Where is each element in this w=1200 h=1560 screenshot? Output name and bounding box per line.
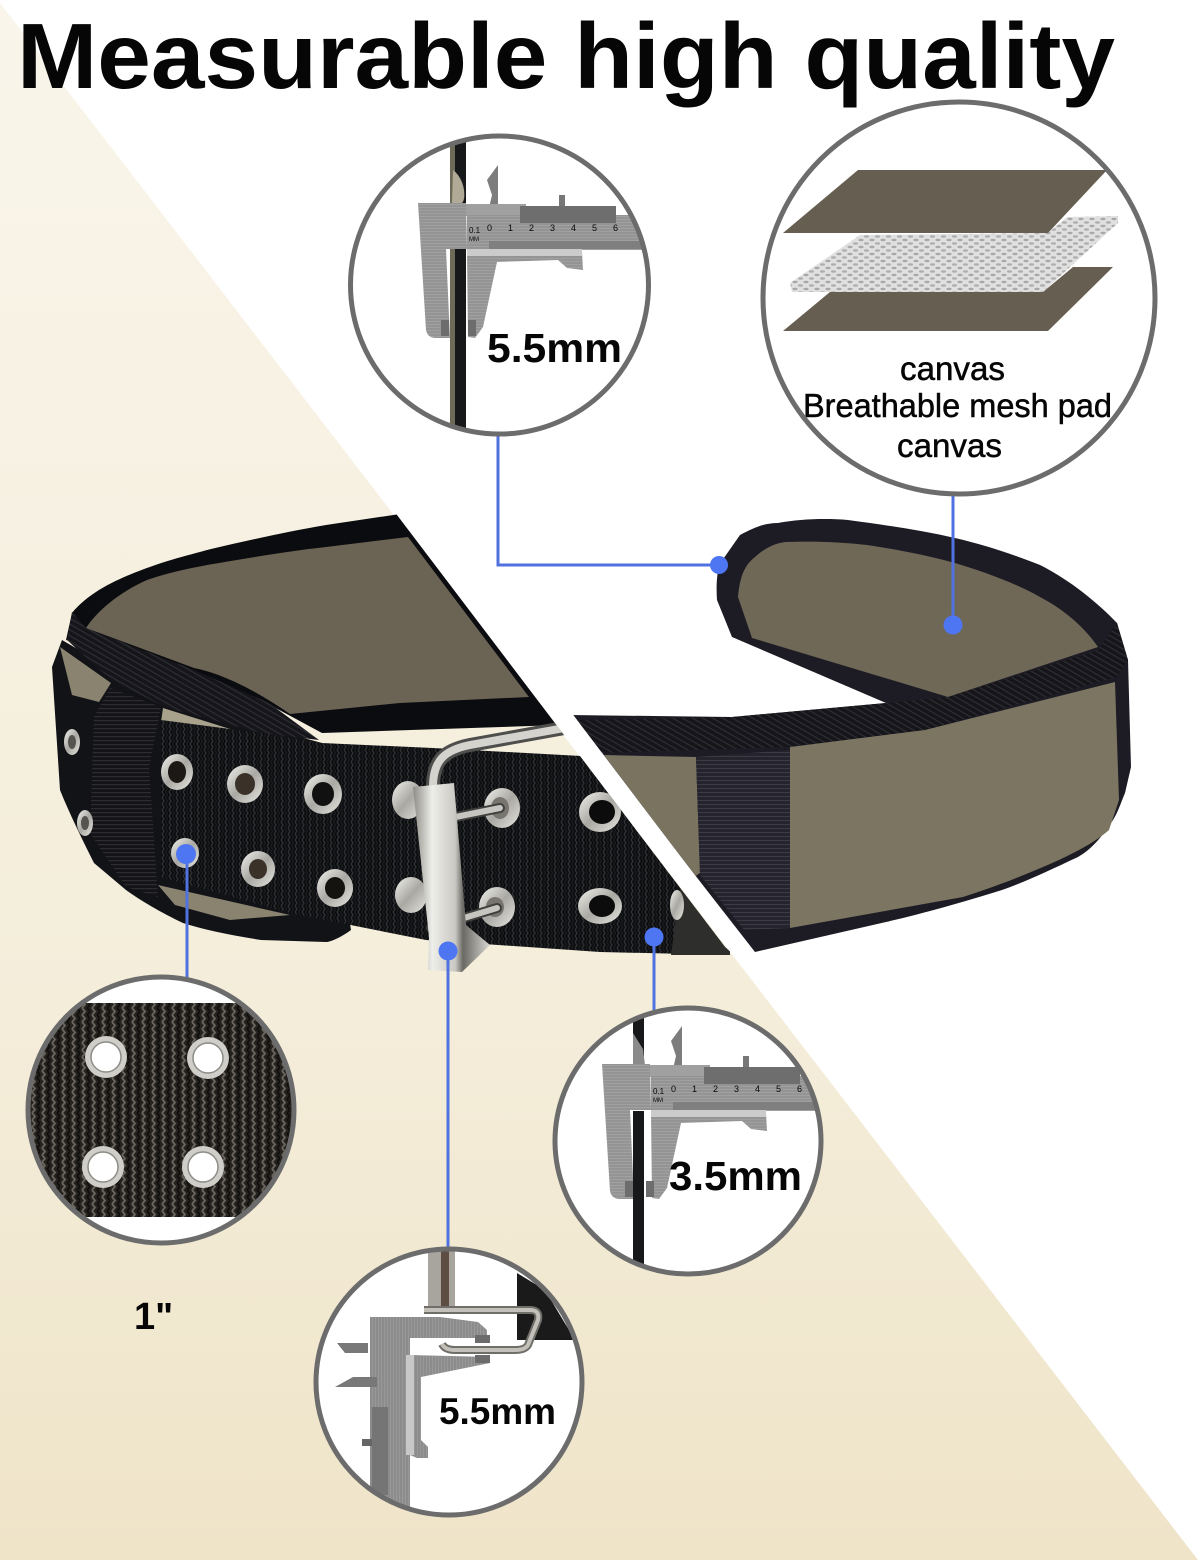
buckle and rotated caliper — [335, 1248, 575, 1507]
layer labels: canvas — [897, 427, 1002, 464]
leader: layers circle to lining — [952, 493, 954, 625]
grommets — [161, 754, 684, 927]
main woven strap — [161, 720, 730, 955]
belt: left half, front with buckle — [52, 514, 730, 972]
caliper and strap edge: 0.1 — [653, 1087, 665, 1096]
caliper and belt edge: 4 — [571, 223, 576, 233]
caliper and strap edge: 6 — [797, 1084, 802, 1094]
layer labels — [803, 350, 1112, 464]
panel: strap thickness 3.5mm — [555, 1008, 843, 1281]
panel: eyelet spacing — [20, 977, 305, 1243]
caliper and belt edge: 0.1 — [469, 226, 481, 235]
taupe lining — [86, 537, 529, 714]
bottom canvas layer — [783, 267, 1113, 331]
layer labels: canvas — [900, 350, 1005, 387]
caliper and strap edge — [602, 1018, 815, 1264]
caliper and belt edge: 2 — [529, 223, 534, 233]
caliper and strap edge: 2 — [713, 1084, 718, 1094]
back black body — [52, 640, 351, 942]
steel buckle — [413, 727, 570, 972]
measurement label: 3.5mm — [669, 1153, 802, 1199]
caliper and belt edge: MM — [469, 237, 479, 243]
main taupe panel — [790, 682, 1119, 928]
dot: lining — [944, 616, 962, 634]
eyelet size label: 1" — [134, 1296, 173, 1338]
leader: buckle circle — [446, 951, 450, 1250]
leader: strap circle — [652, 937, 656, 1010]
mesh pad layer — [790, 216, 1118, 292]
caliper and belt edge: 3 — [550, 223, 555, 233]
woven strap closeup — [20, 1003, 305, 1217]
dot: buckle — [438, 942, 458, 960]
layer labels: Breathable mesh pad — [803, 387, 1112, 424]
caliper and strap edge: 3 — [734, 1084, 739, 1094]
caliper and belt edge: 1 — [508, 223, 513, 233]
dot: belt edge — [710, 556, 728, 574]
callout lines and dots — [176, 435, 962, 1250]
title: Measurable high quality — [17, 4, 1115, 108]
leader: eyelet circle — [186, 855, 188, 978]
measurement label: 5.5mm — [439, 1391, 556, 1432]
webbing loop — [90, 688, 161, 897]
eyelets — [82, 1036, 229, 1188]
taupe strip above strap — [161, 708, 232, 730]
measurement label: 5.5mm — [487, 325, 622, 371]
caliper and belt edge: 5 — [592, 223, 597, 233]
side rivets — [64, 729, 93, 836]
panel: buckle thickness 5.5mm — [316, 1248, 582, 1515]
panel: material layers — [763, 102, 1155, 494]
caliper and strap edge: MM — [653, 1098, 663, 1104]
belt inner lining with black top edge — [66, 514, 560, 733]
caliper and belt edge — [418, 142, 642, 428]
nylon binding band — [67, 612, 319, 740]
caliper and belt edge: 0 — [487, 223, 492, 233]
taupe tongue lining — [738, 542, 1098, 697]
belt: right half, back with taupe lining — [570, 519, 1131, 952]
black end tab — [671, 888, 730, 955]
caliper and strap edge: 4 — [755, 1084, 760, 1094]
belt outer binding — [570, 519, 1131, 952]
caliper and strap edge: 1 — [692, 1084, 697, 1094]
webbing strap — [696, 750, 790, 930]
panel: binding thickness 5.5mm — [350, 135, 659, 435]
dot: strap — [644, 928, 664, 946]
taupe strip under strap — [158, 885, 290, 920]
light taupe side padding — [60, 647, 111, 702]
twill binding band — [577, 623, 1128, 753]
top canvas layer — [783, 170, 1107, 233]
taupe panel small — [603, 755, 700, 880]
caliper and strap edge: 0 — [671, 1084, 676, 1094]
caliper and strap edge: 5 — [776, 1084, 781, 1094]
dot: eyelet — [176, 844, 196, 864]
caliper and belt edge: 6 — [613, 223, 618, 233]
leader: thickness circle to edge — [498, 435, 718, 565]
